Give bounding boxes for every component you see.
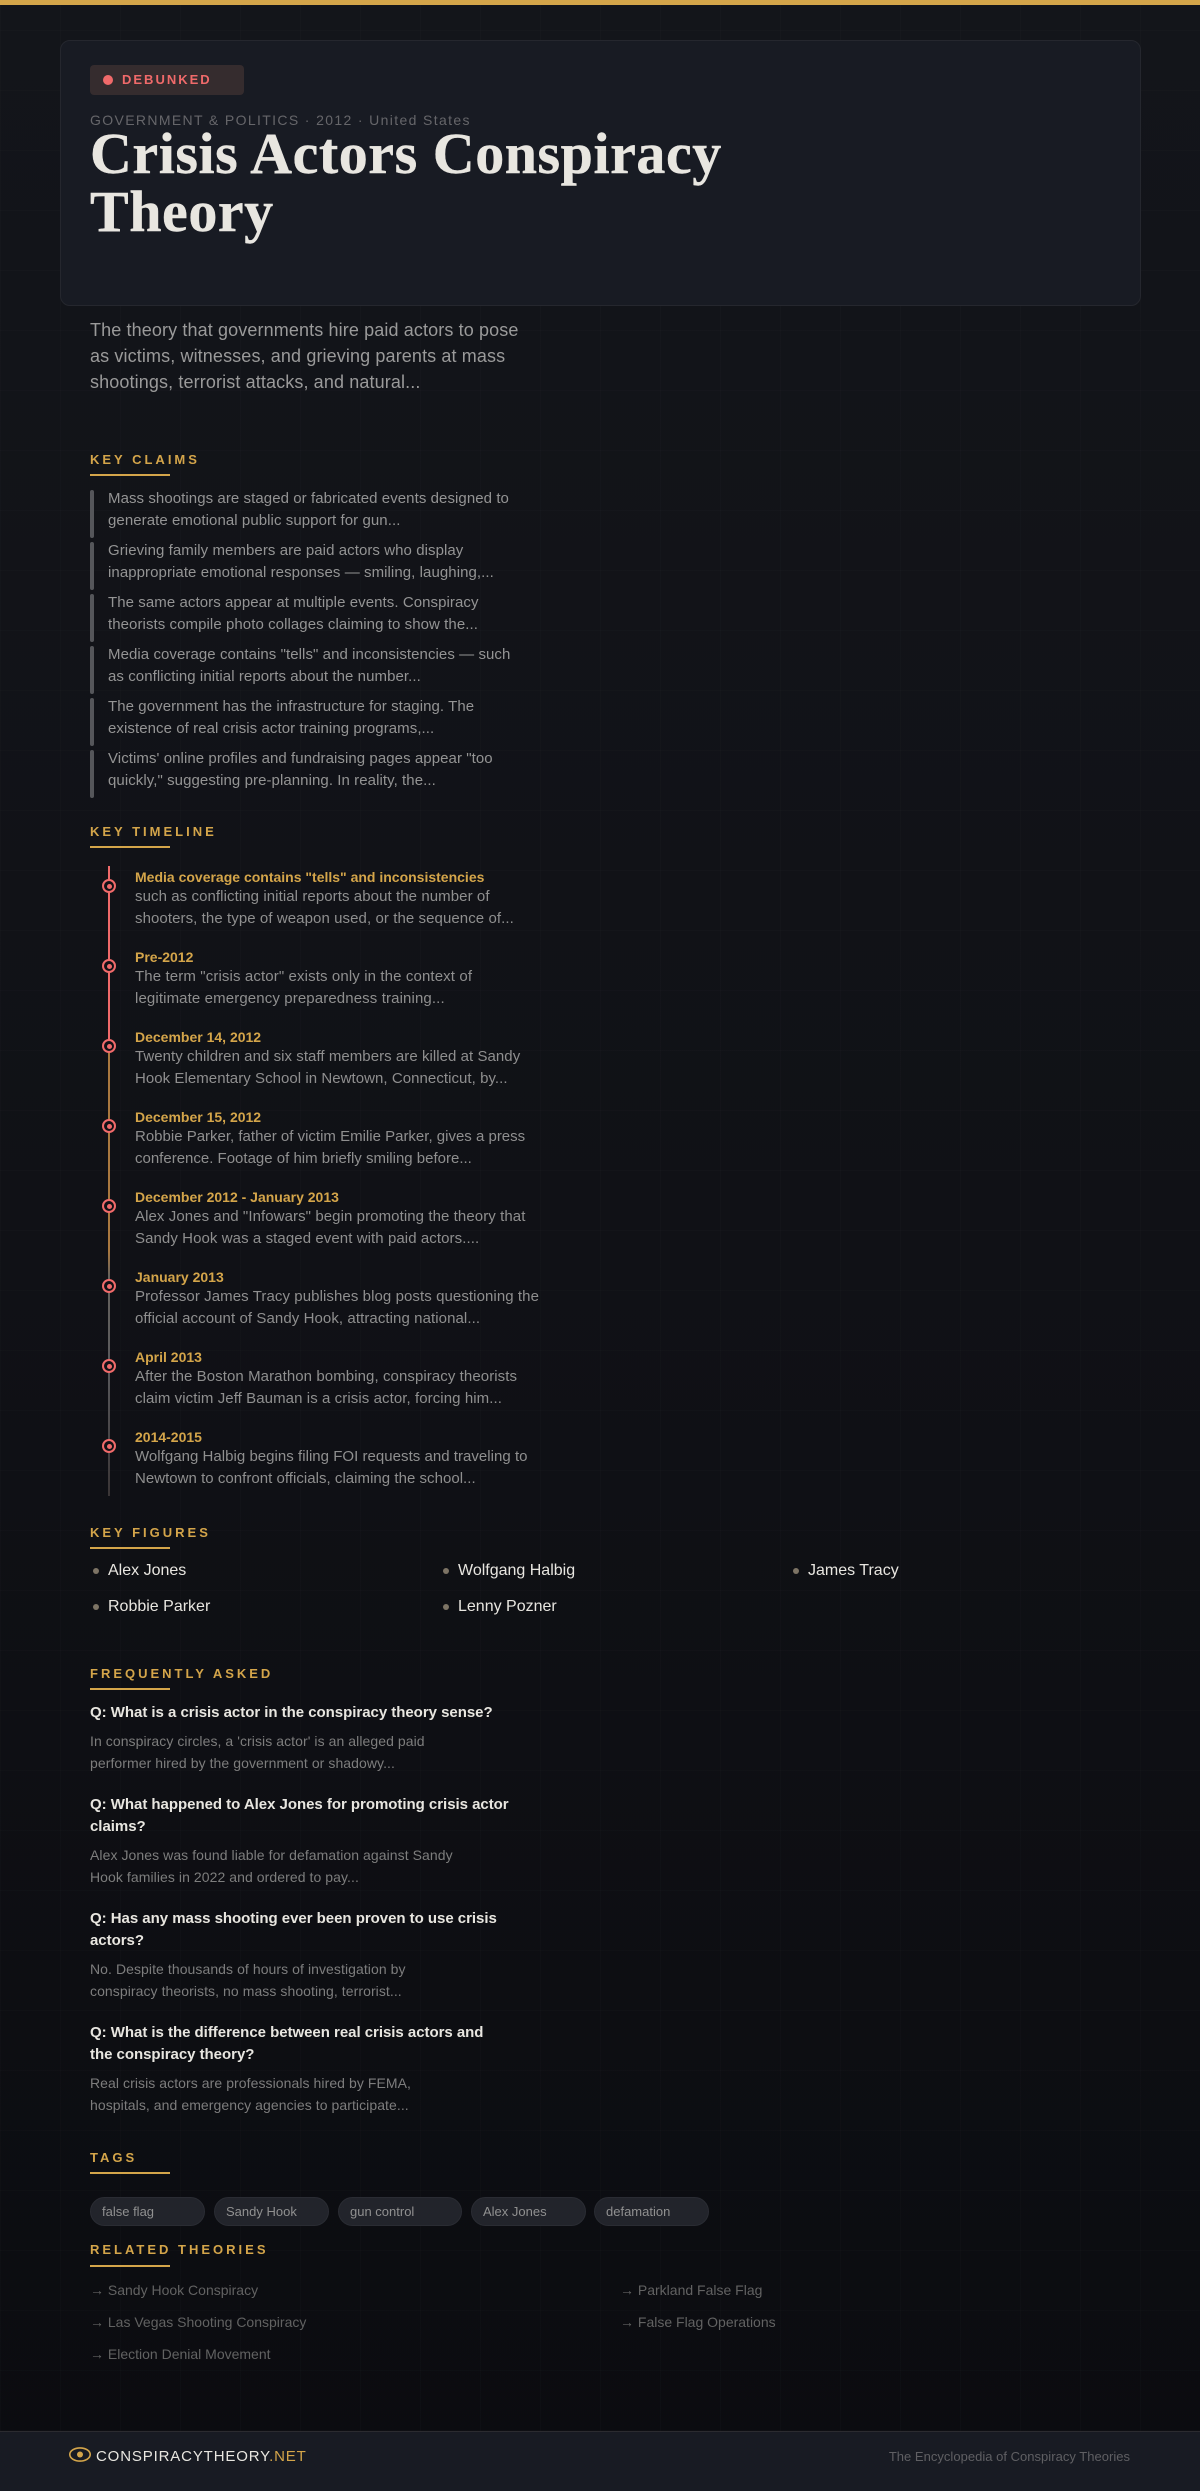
footer tagline: The Encyclopedia of Conspiracy Theories — [889, 2449, 1130, 2464]
timeline event 1: Media coverage contains "tells" and inconsistencies — [135, 869, 484, 885]
question 4 — [90, 2024, 483, 2063]
badge label: DEBUNKED — [122, 72, 212, 87]
figure: Lenny Pozner: Lenny Pozner — [458, 1598, 557, 1615]
figure: Robbie Parker: Robbie Parker — [108, 1598, 210, 1615]
claim 3 — [90, 594, 479, 642]
icon: eye logo — [69, 2447, 91, 2462]
question 1: Q: What is a crisis actor in the conspiracy theory sense? — [90, 1704, 493, 1721]
heading: related theories: RELATED THEORIES — [90, 2242, 268, 2257]
question 2: Q: What happened to Alex Jones for promoting crisis actor — [90, 1796, 509, 1813]
timeline event 2 — [102, 949, 472, 1007]
related link: → Parkland False Flag — [620, 2282, 762, 2298]
claim 3: theorists compile photo collages claiming to show the... — [108, 616, 478, 633]
timeline event 5 — [102, 1189, 526, 1247]
tag: Sandy Hook: Sandy Hook — [226, 2204, 297, 2219]
claim 4: Media coverage contains "tells" and inconsistencies — such — [108, 646, 510, 663]
claim 5 — [90, 698, 474, 746]
heading: frequently asked: FREQUENTLY ASKED — [90, 1666, 273, 1681]
timeline event 8 — [102, 1429, 528, 1487]
tag: false flag: false flag — [102, 2204, 154, 2219]
tag: defamation: defamation — [606, 2204, 670, 2219]
claim 1: generate emotional public support for gun... — [108, 512, 400, 529]
summary text: shootings, terrorist attacks, and natural... — [90, 372, 420, 392]
panel: tags — [90, 2150, 709, 2226]
claim 2: Grieving family members are paid actors who display — [108, 542, 463, 559]
timeline event 1: such as conflicting initial reports about the number of — [135, 888, 490, 905]
timeline event 5: Sandy Hook was a staged event with paid actors.... — [135, 1230, 479, 1247]
timeline event 4: conference. Footage of him briefly smiling before... — [135, 1150, 472, 1167]
related link: → Sandy Hook Conspiracy — [90, 2282, 258, 2298]
claim 6: quickly," suggesting pre-planning. In reality, the... — [108, 772, 436, 789]
timeline event 1: shooters, the type of weapon used, or the sequence of... — [135, 910, 514, 927]
related link: → Las Vegas Shooting Conspiracy — [90, 2314, 306, 2330]
timeline event 5: Alex Jones and "Infowars" begin promoting the theory that — [135, 1208, 525, 1225]
timeline event 7: After the Boston Marathon bombing, conspiracy theorists — [135, 1368, 517, 1385]
question 3: actors? — [90, 1932, 144, 1949]
heading: key figures: KEY FIGURES — [90, 1525, 211, 1540]
claim 5: existence of real crisis actor training programs,... — [108, 720, 434, 737]
answer 2 — [90, 1847, 453, 1885]
title: Theory — [90, 179, 274, 244]
claim 1: Mass shootings are staged or fabricated events designed to — [108, 490, 509, 507]
timeline event 6: official account of Sandy Hook, attracting national... — [135, 1310, 480, 1327]
question 3 — [90, 1910, 497, 1949]
claim 4 — [90, 646, 510, 694]
answer 1: In conspiracy circles, a 'crisis actor' is an alleged paid — [90, 1733, 425, 1749]
panel: key timeline — [90, 824, 539, 1496]
timeline event 7 — [102, 1349, 517, 1407]
claim 6 — [90, 750, 493, 798]
answer 1: performer hired by the government or shadowy... — [90, 1755, 395, 1771]
figure: Wolfgang Halbig: Wolfgang Halbig — [458, 1562, 575, 1579]
tag: Sandy Hook — [214, 2197, 329, 2226]
timeline event 8: Newtown to confront officials, claiming the school... — [135, 1470, 476, 1487]
figure: Alex Jones: Alex Jones — [108, 1562, 186, 1579]
title — [90, 121, 722, 244]
timeline event 6: January 2013 — [135, 1269, 224, 1285]
timeline event 4 — [102, 1109, 525, 1167]
category meta line: GOVERNMENT & POLITICS · 2012 · United States — [90, 112, 471, 128]
timeline line — [108, 866, 110, 1496]
answer 4: Real crisis actors are professionals hired by FEMA, — [90, 2075, 411, 2091]
tag: gun control: gun control — [350, 2204, 414, 2219]
question 4: Q: What is the difference between real crisis actors and — [90, 2024, 483, 2041]
timeline event 1 — [102, 869, 514, 927]
answer 1 — [90, 1733, 425, 1771]
claim 1 — [90, 490, 509, 538]
title: Crisis Actors Conspiracy — [90, 121, 722, 186]
claim 2: inappropriate emotional responses — smiling, laughing,... — [108, 564, 494, 581]
related link: → False Flag Operations — [620, 2314, 776, 2330]
timeline event 7: April 2013 — [135, 1349, 202, 1365]
answer 3: No. Despite thousands of hours of investigation by — [90, 1961, 406, 1977]
timeline event 5: December 2012 - January 2013 — [135, 1189, 339, 1205]
claim 2 — [90, 542, 494, 590]
question 2: claims? — [90, 1818, 146, 1835]
timeline event 8: 2014-2015 — [135, 1429, 202, 1445]
answer 4 — [90, 2075, 411, 2113]
timeline event 2: The term "crisis actor" exists only in the context of — [135, 968, 472, 985]
question 2 — [90, 1796, 509, 1835]
timeline event 6: Professor James Tracy publishes blog posts questioning the — [135, 1288, 539, 1305]
timeline event 3: Twenty children and six staff members are killed at Sandy — [135, 1048, 520, 1065]
badge: debunked — [90, 65, 244, 95]
panel: header card — [60, 40, 1141, 306]
question 4: the conspiracy theory? — [90, 2046, 254, 2063]
heading: tags: TAGS — [90, 2150, 137, 2165]
timeline event 2: legitimate emergency preparedness training... — [135, 990, 445, 1007]
icon: status dot — [103, 75, 113, 85]
footer logo text: CONSPIRACYTHEORY.NET — [96, 2448, 307, 2465]
claim 3: The same actors appear at multiple events. Conspiracy — [108, 594, 479, 611]
answer 2: Hook families in 2022 and ordered to pay... — [90, 1869, 359, 1885]
panel: key claims — [90, 452, 510, 798]
question 3: Q: Has any mass shooting ever been proven to use crisis — [90, 1910, 497, 1927]
timeline event 4: December 15, 2012 — [135, 1109, 261, 1125]
related link: → Election Denial Movement — [90, 2346, 271, 2362]
answer 3 — [90, 1961, 406, 1999]
heading: key claims: KEY CLAIMS — [90, 452, 200, 467]
timeline event 3: Hook Elementary School in Newtown, Connecticut, by... — [135, 1070, 508, 1087]
summary text — [90, 320, 518, 392]
timeline event 2: Pre-2012 — [135, 949, 193, 965]
top accent bar — [0, 0, 1200, 5]
answer 4: hospitals, and emergency agencies to participate... — [90, 2097, 409, 2113]
claim 5: The government has the infrastructure for staging. The — [108, 698, 474, 715]
timeline event 7: claim victim Jeff Bauman is a crisis actor, forcing him... — [135, 1390, 502, 1407]
panel: related theories — [90, 2242, 776, 2362]
summary text: The theory that governments hire paid actors to pose — [90, 320, 518, 340]
tag: false flag — [90, 2197, 205, 2226]
tag: Alex Jones — [471, 2197, 586, 2226]
claim 4: as conflicting initial reports about the number... — [108, 668, 421, 685]
timeline event 3: December 14, 2012 — [135, 1029, 261, 1045]
tag: defamation — [594, 2197, 709, 2226]
panel: frequently asked — [90, 1666, 509, 2113]
footer — [0, 2431, 1200, 2491]
heading: key timeline: KEY TIMELINE — [90, 824, 217, 839]
tag: gun control — [338, 2197, 462, 2226]
timeline event 3 — [102, 1029, 520, 1087]
timeline event 6 — [102, 1269, 539, 1327]
panel: key figures — [90, 1525, 899, 1615]
figure: James Tracy: James Tracy — [808, 1562, 899, 1579]
tag: Alex Jones: Alex Jones — [483, 2204, 547, 2219]
timeline event 8: Wolfgang Halbig begins filing FOI requests and traveling to — [135, 1448, 528, 1465]
answer 3: conspiracy theorists, no mass shooting, terrorist... — [90, 1983, 402, 1999]
answer 2: Alex Jones was found liable for defamation against Sandy — [90, 1847, 453, 1863]
summary text: as victims, witnesses, and grieving parents at mass — [90, 346, 505, 366]
timeline event 4: Robbie Parker, father of victim Emilie Parker, gives a press — [135, 1128, 525, 1145]
claim 6: Victims' online profiles and fundraising pages appear "too — [108, 750, 493, 767]
